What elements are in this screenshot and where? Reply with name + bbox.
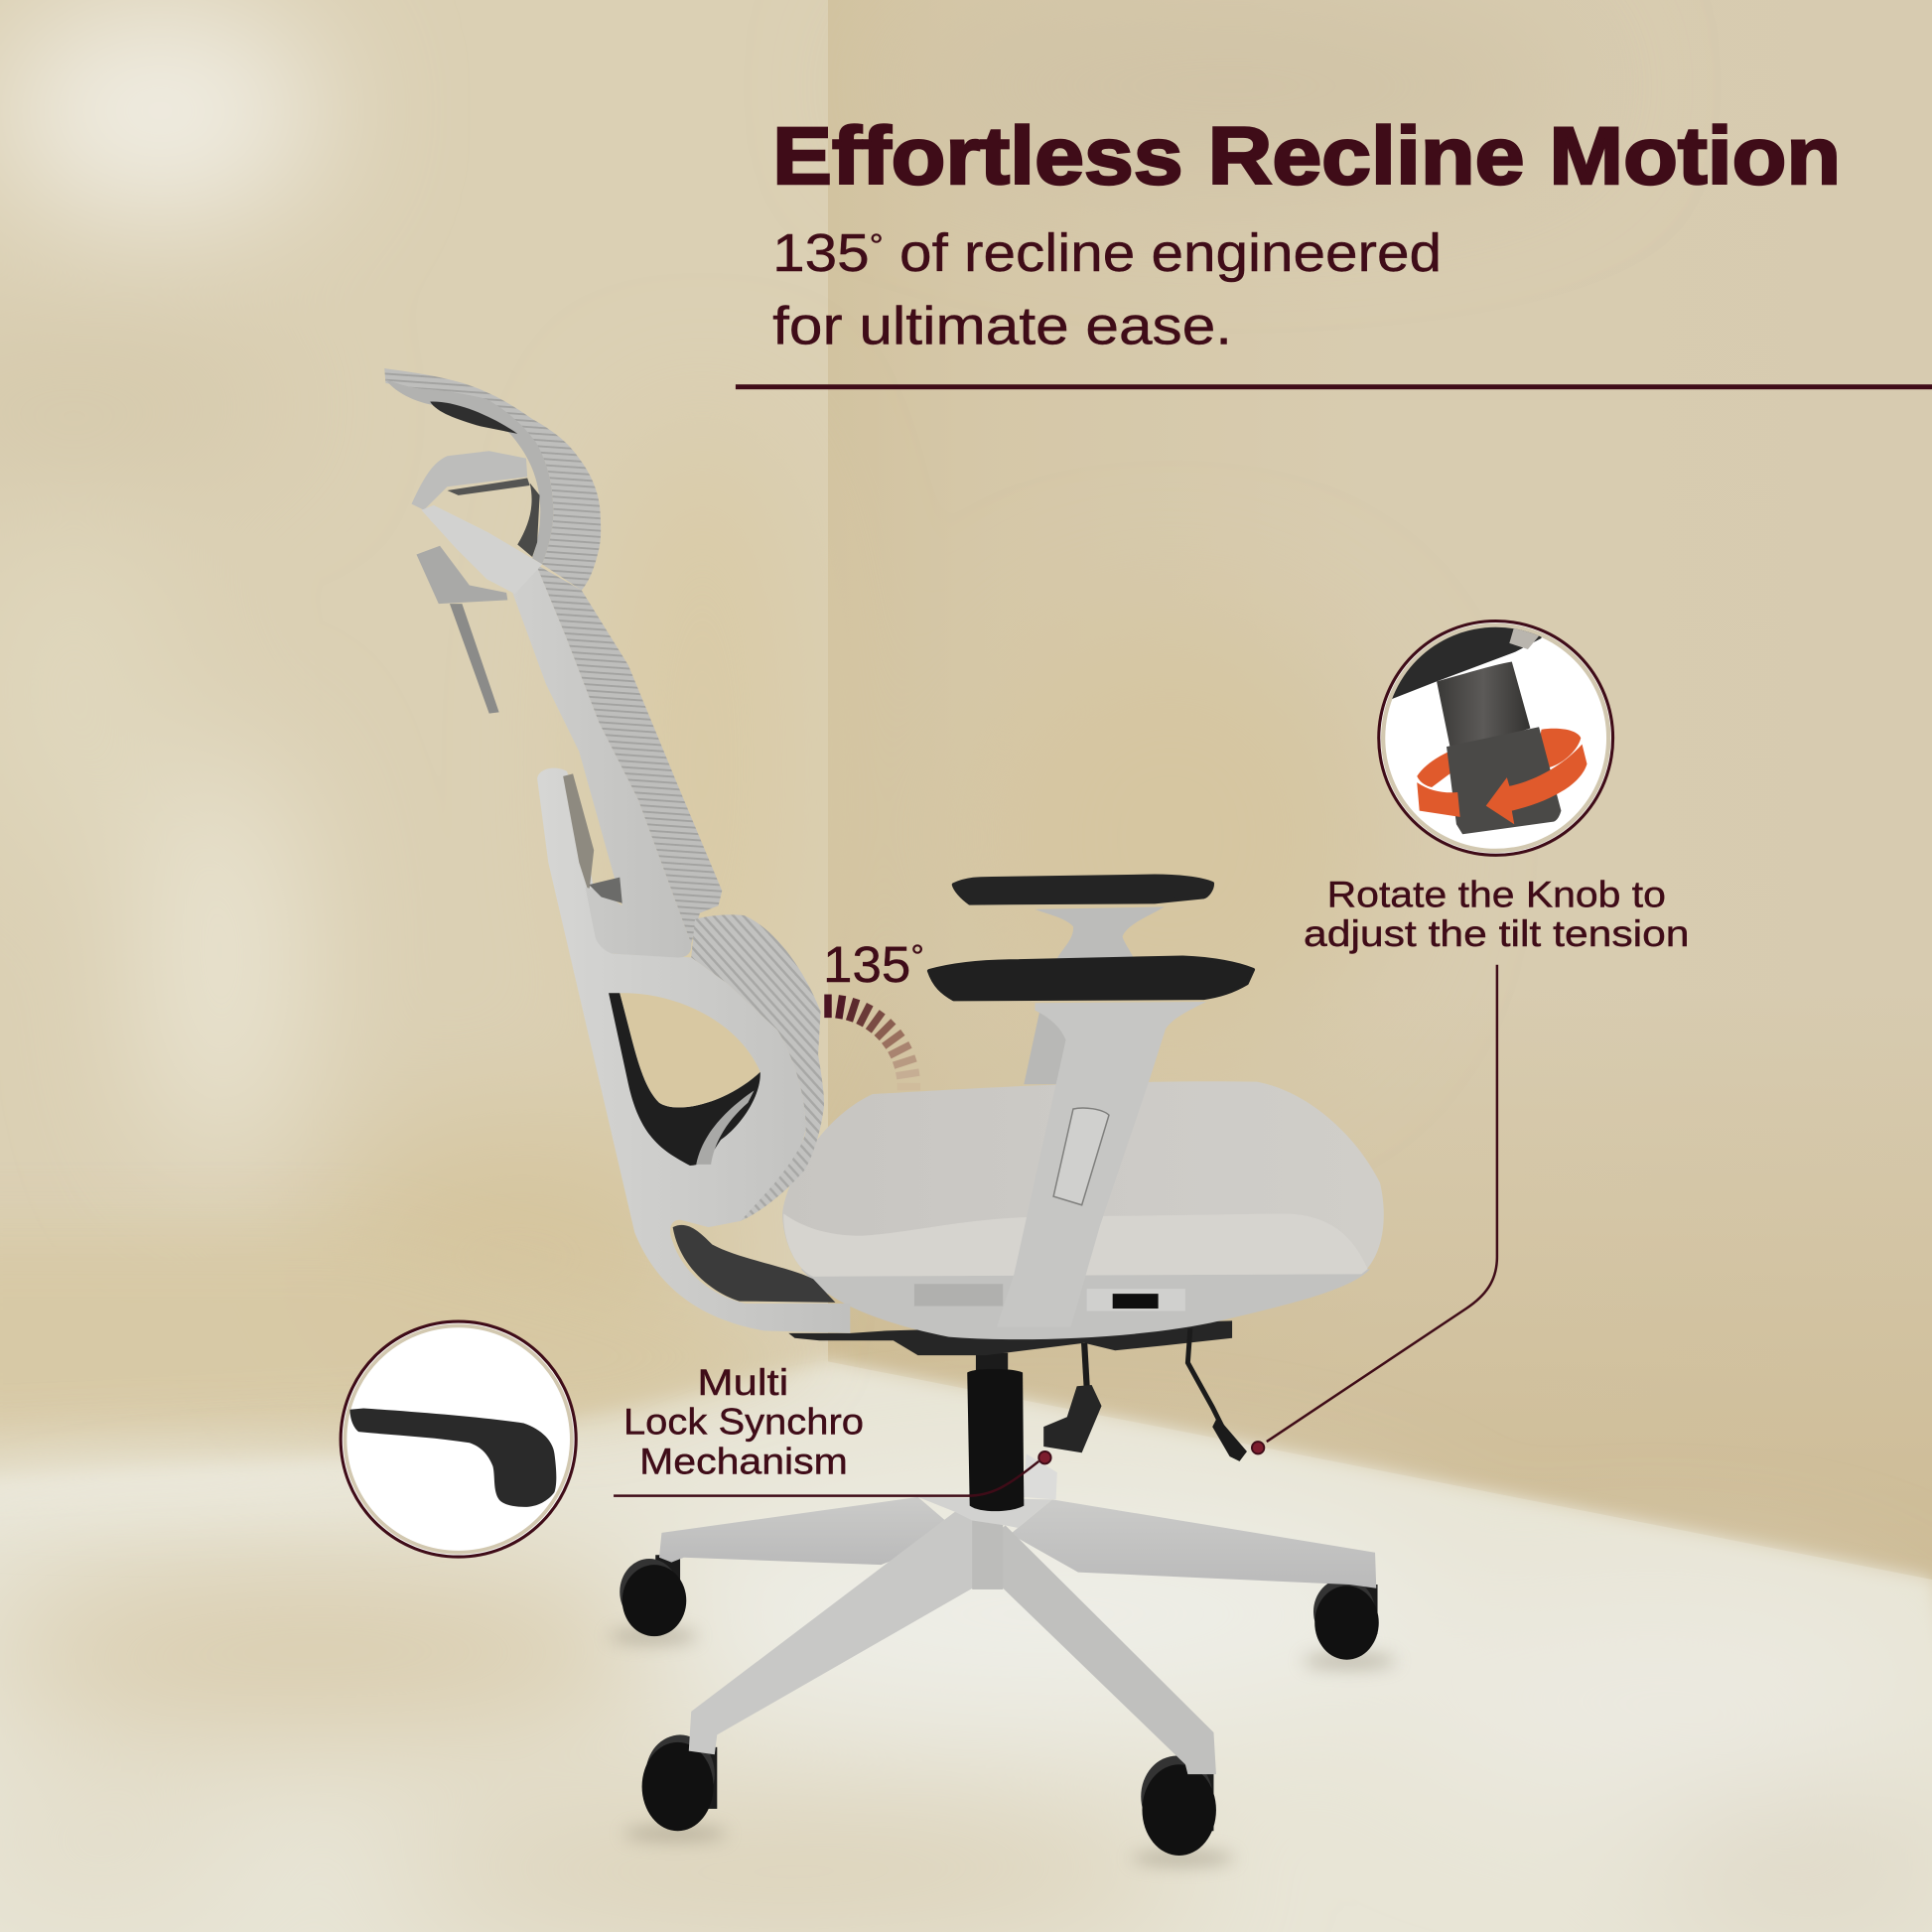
- caster shadows: [609, 1629, 1396, 1865]
- callout text: tilt tension: [1304, 873, 1690, 954]
- gas cylinder: [967, 1353, 1024, 1511]
- spine frame: [430, 519, 691, 958]
- callout text: synchro mechanism: Multi: [697, 1361, 788, 1403]
- inset circle: [1379, 621, 1613, 855]
- subtitle: 135: [772, 224, 861, 283]
- bracket clip: [589, 878, 622, 903]
- casters: [620, 1555, 1379, 1856]
- lumbar mesh: [691, 914, 824, 1221]
- lower seat back opening: [673, 1225, 835, 1303]
- callout text: synchro mechanism: Lock Synchro: [623, 1401, 864, 1443]
- headrest mesh: [384, 368, 601, 590]
- title: Effortless Recline Motion: [772, 111, 1841, 202]
- lumbar opening: [609, 993, 760, 1166]
- back mesh: [536, 564, 722, 944]
- lower armrest pad: [929, 957, 1253, 1000]
- tension lever: [1187, 1328, 1236, 1453]
- seat cushion: [782, 1081, 1384, 1277]
- recline degree label: °: [910, 938, 924, 974]
- back strap: [563, 773, 594, 894]
- leader line: tilt tension: [1252, 965, 1497, 1453]
- upper armrest post: [1035, 906, 1165, 959]
- recline degree label: 135: [823, 936, 907, 993]
- far armrest post: [1024, 1004, 1072, 1084]
- tilt mechanism: [788, 1320, 1232, 1355]
- headrest bracket: [412, 451, 542, 714]
- callout: lock lever: [341, 1321, 576, 1557]
- headrest inner frame: [385, 379, 553, 564]
- icon: knob with rotation arrow: [1390, 617, 1587, 834]
- callout text: tilt tension: adjust the tilt tension: [1304, 912, 1690, 954]
- recline dial ticks: [824, 995, 920, 1090]
- callout text: tilt tension: Rotate the Knob to: [1327, 873, 1666, 914]
- callout text: synchro mechanism: Mechanism: [639, 1440, 848, 1481]
- subtitle: °: [870, 227, 884, 263]
- leader line: synchro mechanism: [614, 1451, 1051, 1496]
- seat pan: [801, 1269, 1370, 1339]
- title divider line: [736, 384, 1932, 389]
- base star legs: [659, 1453, 1376, 1774]
- lower frame: [537, 768, 850, 1333]
- icon: lever handle: [349, 1409, 556, 1507]
- subtitle: [772, 224, 1442, 355]
- armrest adjuster button: [1053, 1108, 1109, 1205]
- callout text: synchro mechanism: [623, 1361, 864, 1481]
- subtitle: of recline engineered: [884, 224, 1442, 283]
- chair: [384, 368, 1396, 1865]
- near armrest post: [997, 1002, 1206, 1327]
- callout: tilt tension knob: [1379, 617, 1613, 855]
- upper armrest pad: [954, 876, 1212, 903]
- lock paddle lever: [1043, 1343, 1102, 1452]
- subtitle: for ultimate ease.: [772, 297, 1232, 355]
- inset circle: [341, 1321, 576, 1557]
